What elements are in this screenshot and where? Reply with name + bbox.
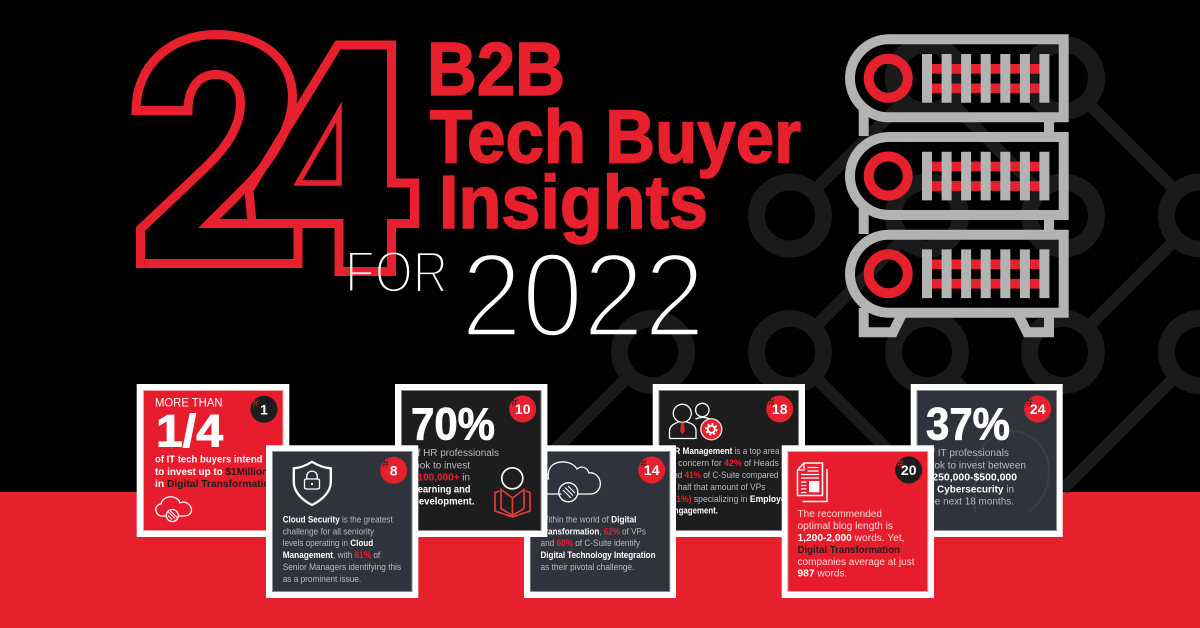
text block: optimal blog length is [798,521,893,532]
stat: 70%: 70% [411,398,495,449]
text block: the next 18 months. [926,497,1014,508]
text block: and 41% of C-Suite compared [668,470,778,480]
card 14: digital transformation challenge [524,445,676,598]
text block [540,514,656,572]
text block [155,455,276,490]
text block: in Cybersecurity in [926,485,1014,496]
badge: #24: # [1026,397,1033,409]
icon: reader with open book [495,468,530,517]
text block: Digital Technology Integration [540,550,656,560]
text block: to invest up to $1Million [155,467,268,478]
icon: digital cloud [546,462,600,502]
badge: #20 [895,456,922,484]
stat: 37%: 37% [926,398,1010,449]
text block: of HR professionals [412,448,499,459]
title: B2B Tech Buyer Insights: B2B [427,27,565,111]
text block: of IT professionals [926,448,1009,459]
text block: 1,200-2,000 words. Yet, [798,533,904,544]
badge: #20: # [897,458,904,470]
text block: of IT tech buyers intend [155,455,262,466]
badge: #18: 18 [772,401,788,417]
text block: look to invest between [926,460,1026,471]
text block: challenge for all seniority [283,526,375,536]
title: B2B Tech Buyer Insights: Tech Buyer [430,94,801,178]
card 8: cloud security [266,445,418,598]
watermark icon: shield cloud [975,431,1049,512]
text block: The recommended [798,509,882,520]
badge: #1 [250,396,278,423]
card 1: one quarter of IT tech buyers [137,384,289,537]
text block: as a prominent issue. [283,574,361,584]
badge: #14: # [640,458,647,470]
text block: Senior Managers identifying this [283,562,402,572]
card 24: cybersecurity investment [911,384,1063,537]
badge: #24 [1024,396,1051,422]
title: B2B Tech Buyer Insights [427,27,801,244]
badge: #14: 14 [644,462,660,478]
text block: Digital Transformation [798,545,900,556]
text block: Learning and [412,485,470,496]
card 10: HR learning and development [395,384,547,537]
text block: Cloud Security is the greatest [283,514,393,524]
text block: $250,000-$500,000 [926,472,1017,483]
badge: #1: 1 [260,401,268,417]
stat: 1/4: 1/4 [156,406,223,457]
text block: 987 words. [798,569,848,580]
text block: companies average at just [798,557,915,568]
icon: security shield [294,462,331,505]
text block: $100,000+ in [412,472,470,483]
text block: levels operating in Cloud [283,538,373,548]
icon: document [798,463,827,502]
text block: Transformation, 62% of VPs [540,526,646,536]
badge: #20: 20 [901,462,917,478]
text block [283,514,402,584]
text block: look to invest [412,460,470,471]
text block: Development. [412,497,475,508]
text block [926,448,1026,508]
background network pattern [516,44,1200,489]
text block [668,446,790,516]
icon: people with gear [670,403,722,440]
text block: and 60% of C-Suite identify [540,538,640,548]
badge: #18 [766,396,793,422]
badge: #10: 10 [515,401,531,417]
text block: as their pivotal challenge. [540,562,634,572]
text block: in Digital Transformation [155,479,276,490]
badge: #8 [380,457,407,484]
title: B2B Tech Buyer Insights: Insights [439,160,708,244]
badge: #10 [509,396,536,422]
text block: HR Management is a top area [668,446,780,456]
card 20: blog length [782,445,934,598]
badge: #18: # [768,397,775,409]
outlined number 24 [136,34,414,272]
title: FOR: FOR [345,240,448,305]
red lower band [0,492,1200,628]
text block [798,509,915,580]
text: more than: MORE THAN [155,398,222,410]
card 18: HR management [653,384,805,537]
badge: #8: # [382,458,389,470]
icon: server rack [850,39,1064,332]
text block: (21%) specializing in Employee [668,494,790,504]
text block: Management, with 61% of [283,550,381,560]
title: 2022: 2022 [461,228,705,362]
badge: #1: # [252,398,260,410]
text block: to half that amount of VPs [668,482,766,492]
badge: #8: 8 [390,462,398,478]
text block [412,448,499,508]
badge: #10: # [511,397,518,409]
badge: #24: 24 [1030,401,1046,417]
text block: Engagement. [668,506,718,516]
text block: Within the world of Digital [540,514,636,524]
text block: of concern for 42% of Heads of [668,458,789,468]
icon: digital cloud [156,497,192,522]
badge: #14 [638,456,665,484]
